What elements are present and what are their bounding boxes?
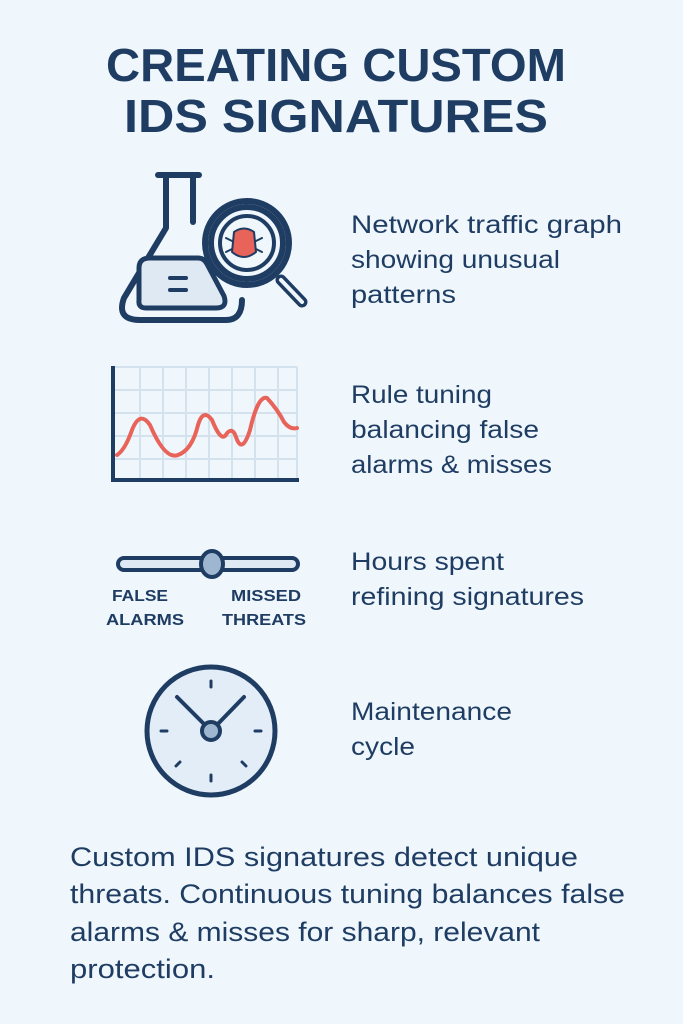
icon: flask with magnifier <box>122 175 302 320</box>
text: summary: threats. Continuous tuning balances false <box>70 879 625 909</box>
title <box>106 39 566 142</box>
text: network traffic: Network traffic graph <box>351 211 622 239</box>
text: rule tuning: balancing false <box>351 416 539 444</box>
text: summary: Custom IDS signatures detect unique <box>70 842 578 872</box>
text: rule tuning <box>351 381 552 479</box>
icon: slider: ALARMS <box>106 612 184 629</box>
text: network traffic: showing unusual <box>351 246 560 274</box>
text: network traffic <box>351 211 622 309</box>
text: hours spent: Hours spent <box>351 548 504 576</box>
text: maintenance <box>351 698 512 761</box>
icon: slider: MISSED <box>231 588 301 605</box>
text: summary: alarms & misses for sharp, relevant <box>70 917 541 947</box>
icon: clock <box>147 667 275 795</box>
icon: slider <box>106 551 306 629</box>
icon: slider: THREATS <box>222 612 306 629</box>
text: maintenance: cycle <box>351 733 415 761</box>
icon: slider: FALSE <box>112 588 168 605</box>
text: hours spent: refining signatures <box>351 583 584 611</box>
chart: traffic graph <box>112 366 299 480</box>
text: summary <box>70 842 625 984</box>
text: summary: protection. <box>70 954 215 984</box>
text: rule tuning: Rule tuning <box>351 381 492 409</box>
title: IDS SIGNATURES <box>124 90 548 142</box>
text: maintenance: Maintenance <box>351 698 512 726</box>
text: hours spent <box>351 548 584 611</box>
title: CREATING CUSTOM <box>106 39 566 91</box>
text: rule tuning: alarms & misses <box>351 451 552 479</box>
text: network traffic: patterns <box>351 281 456 309</box>
